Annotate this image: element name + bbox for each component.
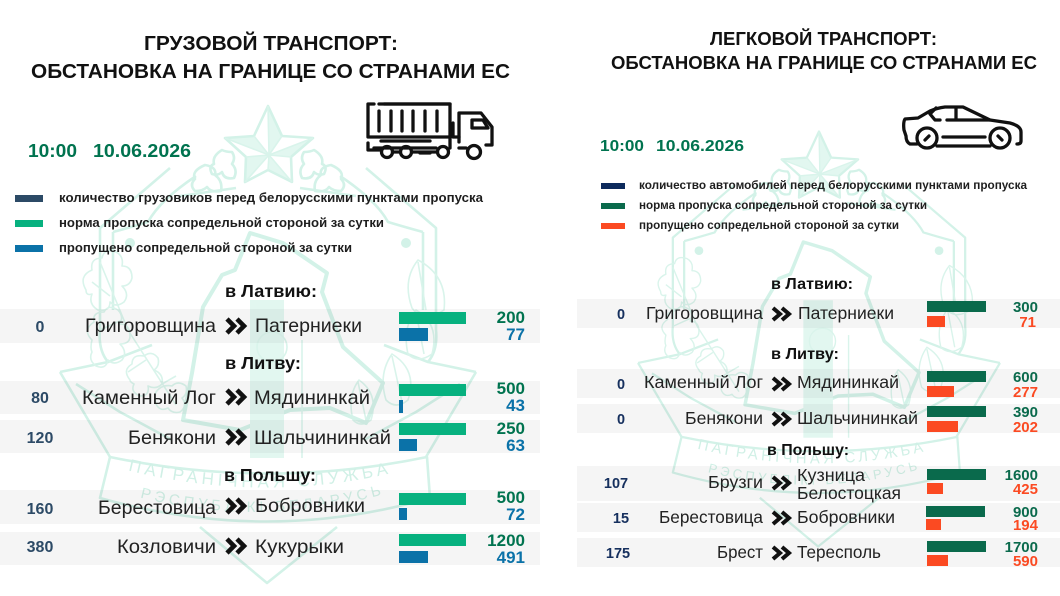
legend: freight: норма пропуска сопредельной стороной за сутки [59, 216, 384, 230]
watermark lettering: РЭСПУБЛІКІ БЕЛАРУСЬ [141, 486, 380, 512]
row: Bruzgi - Kuznica Bialostocka: Кузница [797, 465, 865, 485]
heading: to Latvia: в Латвию: [225, 281, 317, 301]
panel: freight transport [0, 31, 540, 567]
row: Benyakoni - Salcininkai: Бенякони [685, 408, 763, 428]
row: Benyakoni - Salcininkai: Шальчининкай [254, 427, 391, 449]
row: Kamenny Log - Medininkai: 80 [31, 390, 49, 407]
row: Benyakoni - Salcininkai: 63 [506, 436, 525, 455]
row: Grigorovshchina - Paternieki: Григоровщина [85, 315, 216, 337]
row: Berestovitsa - Bobrowniki: 15 [613, 511, 629, 527]
row: Berestovitsa - Bobrowniki [577, 503, 1060, 534]
title: freight: ГРУЗОВОЙ ТРАНСПОРТ: [144, 31, 398, 55]
date and time: 10:00 [600, 138, 644, 155]
row: Grigorovshchina - Paternieki: 300 [1013, 299, 1038, 316]
row: Kozlovichi - Kukuryki: Козловичи [117, 536, 216, 558]
legend: freight: пропущено сопредельной стороной за сутки [59, 241, 352, 255]
row: Berestovitsa - Bobrowniki: Берестовица [659, 507, 763, 527]
row: Bruzgi - Kuznica Bialostocka: 1600 [1005, 467, 1038, 484]
row: Berestovitsa - Bobrowniki: Бобровники [797, 507, 895, 527]
watermark lettering [129, 460, 388, 512]
row: Grigorovshchina - Paternieki: Патерниеки [255, 315, 362, 337]
row: Berestovitsa - Bobrowniki: Берестовица [98, 497, 216, 519]
legend: passenger: пропущено сопредельной стороной за сутки [639, 220, 899, 232]
row: Benyakoni - Salcininkai: Шальчининкай [797, 408, 918, 428]
row: Benyakoni - Salcininkai: 390 [1013, 404, 1038, 421]
row: Kamenny Log - Medininkai: 43 [506, 396, 525, 415]
row: Grigorovshchina - Paternieki: 71 [1019, 314, 1036, 331]
icon: car [904, 107, 1021, 148]
row: Kamenny Log - Medininkai [577, 369, 1060, 401]
watermark lettering: ПАГРАНІЧНАЯ СЛУЖБА [698, 439, 924, 464]
heading: to Lithuania: в Литву: [225, 353, 301, 373]
row: Benyakoni - Salcininkai: 0 [617, 412, 625, 428]
panel: passenger transport [577, 28, 1060, 570]
row: Kozlovichi - Kukuryki: 1200 [487, 531, 525, 550]
row: Berestovitsa - Bobrowniki: 900 [1013, 504, 1038, 521]
row: Berestovitsa - Bobrowniki: 500 [497, 488, 525, 507]
row: Grigorovshchina - Paternieki: 0 [36, 319, 45, 336]
row: Grigorovshchina - Paternieki: Патерниеки [798, 303, 894, 323]
date and time [600, 138, 744, 155]
watermark emblem: left [59, 104, 477, 584]
date and time [28, 141, 191, 161]
row: Bruzgi - Kuznica Bialostocka [577, 465, 1060, 503]
watermark lettering [698, 439, 924, 485]
title: freight: ОБСТАНОВКА НА ГРАНИЦЕ СО СТРАНАМИ ЕС [31, 60, 510, 83]
row: Kamenny Log - Medininkai: Каменный Лог [82, 387, 216, 409]
heading: to Poland: в Польшу: [767, 442, 849, 459]
heading: to Poland: в Польшу: [224, 465, 316, 485]
title: passenger: ЛЕГКОВОЙ ТРАНСПОРТ: [710, 28, 937, 49]
row: Benyakoni - Salcininkai: Бенякони [128, 427, 216, 449]
row: Kamenny Log - Medininkai: 600 [1013, 369, 1038, 386]
watermark emblem: right [637, 130, 1001, 548]
row: Grigorovshchina - Paternieki: 0 [617, 307, 625, 323]
row: Bruzgi - Kuznica Bialostocka: Брузги [708, 472, 763, 492]
row: Benyakoni - Salcininkai: 202 [1013, 419, 1038, 436]
row: Kozlovichi - Kukuryki: 380 [27, 539, 53, 556]
title: passenger [611, 28, 1037, 73]
heading: to Lithuania: в Литву: [771, 346, 839, 363]
row: Berestovitsa - Bobrowniki: 72 [506, 505, 525, 524]
row: Kamenny Log - Medininkai: Каменный Лог [644, 372, 763, 392]
watermark lettering: ПАГРАНІЧНАЯ СЛУЖБА [129, 460, 388, 488]
heading: to Latvia: в Латвию: [771, 276, 853, 293]
row: Berestovitsa - Bobrowniki: 194 [1013, 517, 1039, 534]
row: Brest - Terespol: 175 [606, 546, 630, 562]
row: Kozlovichi - Kukuryki: 491 [497, 548, 525, 567]
row: Kamenny Log - Medininkai: Мядининкай [797, 372, 899, 392]
row: Kamenny Log - Medininkai: 0 [617, 377, 625, 393]
row: Grigorovshchina - Paternieki: 200 [497, 308, 525, 327]
row: Kamenny Log - Medininkai [0, 379, 540, 415]
row: Berestovitsa - Bobrowniki: Бобровники [255, 495, 365, 517]
row: Kozlovichi - Kukuryki: Кукурыки [255, 536, 344, 558]
legend: passenger [601, 180, 1028, 232]
title: freight [31, 31, 510, 83]
legend: passenger: количество автомобилей перед белорусскими пунктами пропуска [639, 180, 1028, 192]
row: Benyakoni - Salcininkai: 120 [27, 430, 53, 447]
row: Bruzgi - Kuznica Bialostocka: 425 [1013, 481, 1038, 498]
row: Kamenny Log - Medininkai: 277 [1013, 384, 1038, 401]
row: Kamenny Log - Medininkai: Мядининкай [254, 387, 370, 409]
row: Grigorovshchina - Paternieki [0, 308, 540, 344]
row: Berestovitsa - Bobrowniki: 160 [27, 501, 53, 518]
legend: freight: количество грузовиков перед белорусскими пунктами пропуска [59, 191, 484, 205]
row: Grigorovshchina - Paternieki: Григоровщина [646, 303, 763, 323]
legend: freight [15, 191, 484, 255]
watermark lettering: РЭСПУБЛІКІ БЕЛАРУСЬ [708, 462, 917, 485]
row: Grigorovshchina - Paternieki [577, 299, 1060, 331]
date and time: 10.06.2026 [656, 138, 744, 155]
legend: passenger: норма пропуска сопредельной стороной за сутки [639, 200, 927, 212]
row: Benyakoni - Salcininkai [0, 419, 540, 455]
row: Bruzgi - Kuznica Bialostocka: Белостоцкая [797, 483, 901, 503]
row: Brest - Terespol: Брест [717, 542, 763, 562]
icon: truck [368, 104, 492, 158]
row: Grigorovshchina - Paternieki: 77 [506, 325, 525, 344]
row: Kozlovichi - Kukuryki [0, 531, 540, 567]
row: Bruzgi - Kuznica Bialostocka: 107 [604, 476, 628, 492]
row: Brest - Terespol: 1700 [1005, 539, 1038, 556]
title: passenger: ОБСТАНОВКА НА ГРАНИЦЕ СО СТРАНАМИ ЕС [611, 52, 1037, 73]
row: Benyakoni - Salcininkai: 250 [497, 419, 525, 438]
row: Brest - Terespol: Тересполь [797, 542, 881, 562]
date and time: 10:00 [28, 141, 77, 161]
row: Berestovitsa - Bobrowniki [0, 488, 540, 524]
row: Brest - Terespol: 590 [1013, 553, 1038, 570]
date and time: 10.06.2026 [93, 141, 191, 161]
row: Brest - Terespol [577, 538, 1060, 570]
row: Benyakoni - Salcininkai [577, 404, 1060, 436]
row: Kamenny Log - Medininkai: 500 [497, 379, 525, 398]
